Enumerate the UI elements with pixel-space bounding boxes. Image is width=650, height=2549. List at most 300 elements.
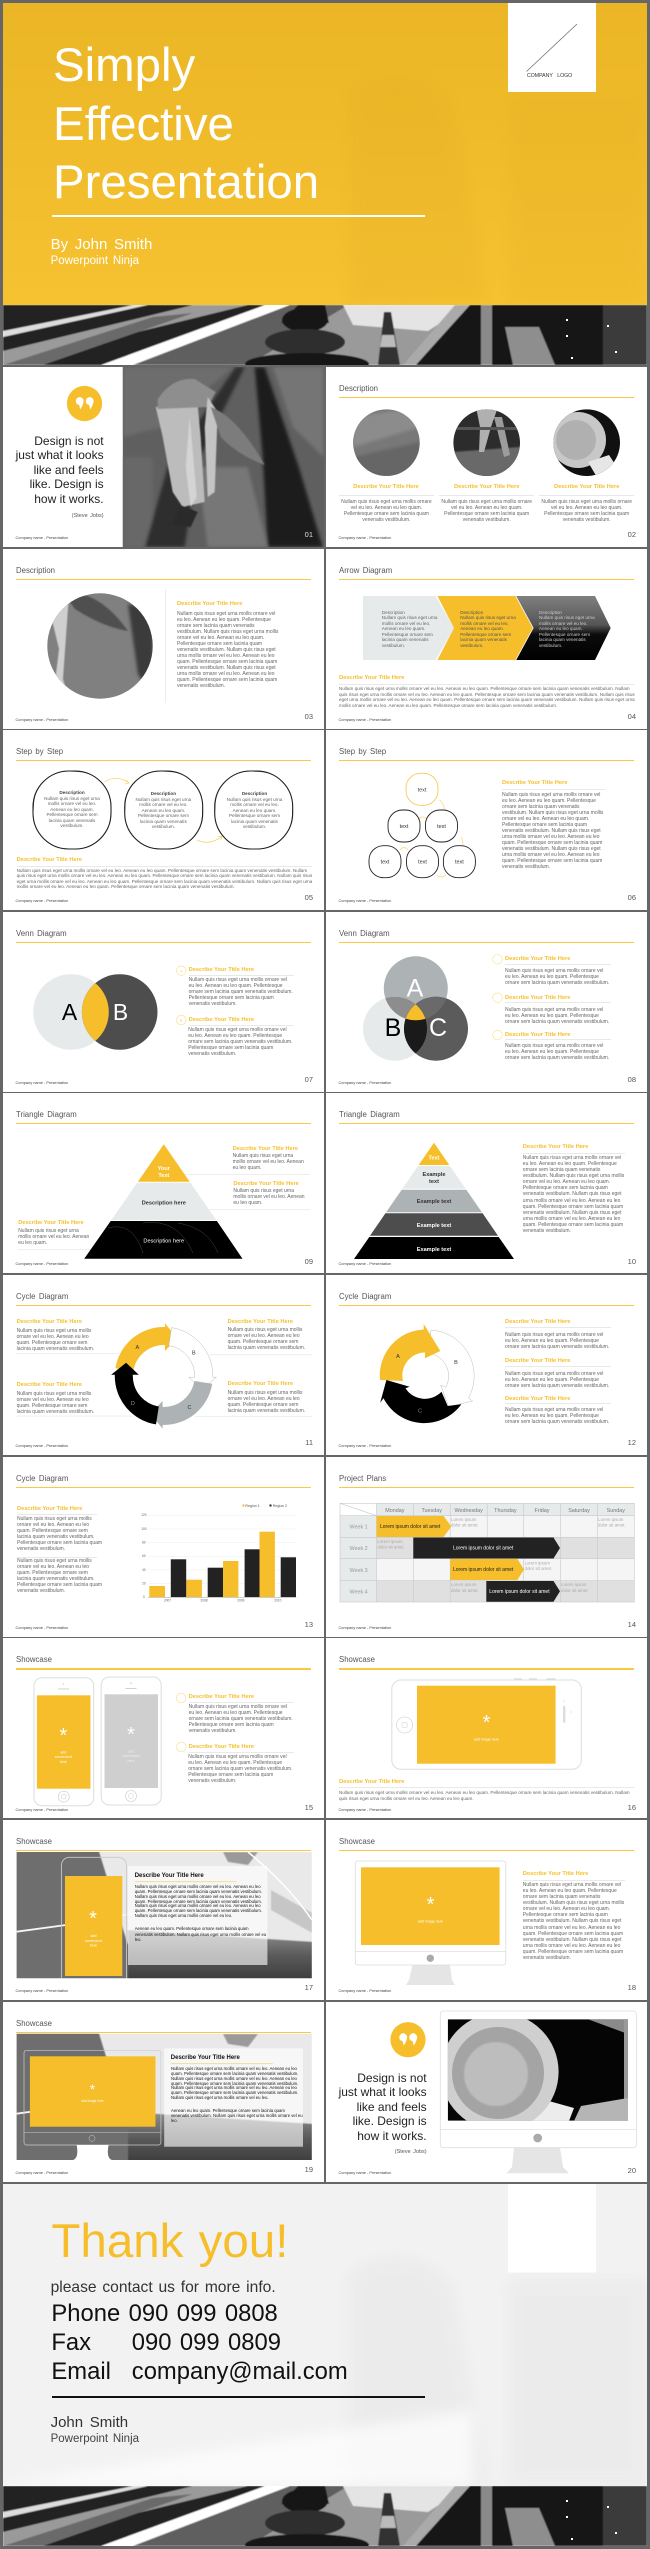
text block 2: venenatis vestibulum. xyxy=(17,1588,65,1594)
translucent text panel xyxy=(128,1866,267,1965)
phone line: Phone 090 099 0808 xyxy=(51,2300,278,2326)
footer: Company name - Presentation xyxy=(338,535,391,540)
heading rule xyxy=(16,1486,311,1488)
body text: ornare sem lacinia quam venenatis xyxy=(177,623,255,629)
image: grass circle xyxy=(353,407,420,477)
left text: eu leo quam. xyxy=(18,1240,47,1246)
body text xyxy=(502,792,604,870)
pyramid level 4: Example text xyxy=(417,1223,451,1229)
subtitle rule xyxy=(502,788,604,791)
small schedule notes: Lorem ipsum xyxy=(598,1517,624,1522)
top left title: Describe Your Title Here xyxy=(17,1319,82,1325)
body text: urna mollis ornare vel eu leo. Aenean eu leo xyxy=(177,671,275,677)
panel: slide 10 triangle diagram xyxy=(326,1093,647,1273)
panel text xyxy=(134,1884,262,1918)
body text xyxy=(16,868,312,889)
right lower text: mollis ornare vel eu leo. Aenean xyxy=(233,1194,305,1200)
top right title: Describe Your Title Here xyxy=(228,1319,293,1325)
panel text: Nullam quis risus eget urna mollis ornare vel eu leo. Aenean eu leo xyxy=(135,1894,261,1899)
item B title: Describe Your Title Here xyxy=(505,995,570,1001)
step 1 text xyxy=(44,790,100,828)
footer: Company name - Presentation xyxy=(338,1261,391,1266)
triangle yellow top: Text xyxy=(158,1173,169,1179)
footer: Company name - Presentation xyxy=(16,2170,68,2175)
column 2 text: venenatis vestibulum. xyxy=(463,517,511,523)
week labels: Week 1 xyxy=(350,1525,368,1531)
small schedule notes xyxy=(377,1517,626,1593)
item B text: venenatis vestibulum. xyxy=(188,1778,236,1784)
fax label: Fax xyxy=(51,2329,91,2356)
panel: slide 15 phone showcase xyxy=(3,1638,324,1818)
panel: slide 19 monitor over photo xyxy=(3,2002,324,2182)
quote text: like and feels xyxy=(357,2100,427,2114)
column 2 rule xyxy=(439,494,534,496)
panel: slide 02 description with three images xyxy=(326,367,647,547)
body text xyxy=(522,1882,624,1961)
phone outline with screen: here xyxy=(90,1944,97,1948)
day headers: Wednesday xyxy=(455,1508,483,1514)
text block 2 xyxy=(17,1558,102,1594)
phone mockup grey: screenshot xyxy=(122,1754,140,1758)
body text: venenatis vestibulum. Nullam quis risus eget xyxy=(177,665,276,671)
panel text: quam. Pellentesque ornare sem lacinia quam venenatis vestibulum. xyxy=(171,2071,298,2076)
body text: vestibulum. Nullam quis risus eget urna mollis xyxy=(177,629,278,635)
subtitle: Describe Your Title Here xyxy=(17,1506,82,1512)
column 2 text xyxy=(441,499,532,523)
page number: 13 xyxy=(305,1620,313,1629)
quote text: Design is not xyxy=(357,2071,427,2085)
small schedule notes: dolor sit amet. xyxy=(451,1588,479,1593)
item A text: ornare sem lacinia quam venenatis vestibulum. xyxy=(505,980,609,986)
panel title: Describe Your Title Here xyxy=(171,2055,240,2061)
subtitle: Describe Your Title Here xyxy=(523,1871,588,1877)
item 2 text xyxy=(505,1371,609,1389)
text block 1: lacinia quam venenatis vestibulum. xyxy=(17,1534,95,1540)
text block 2: quam. Pellentesque ornare sem xyxy=(17,1570,88,1576)
page number: 17 xyxy=(305,1983,313,1992)
step 2 text: Nullam quis risus eget urna xyxy=(136,796,191,802)
heading rule xyxy=(339,578,634,580)
phone outline with screen: add xyxy=(91,1934,96,1938)
page number: 04 xyxy=(628,712,636,721)
y axis labels: 80 xyxy=(142,1540,146,1544)
item C title: Describe Your Title Here xyxy=(505,1032,570,1038)
page number: 03 xyxy=(305,712,313,721)
item A rule xyxy=(189,974,294,977)
column 1 text xyxy=(341,499,432,523)
phone mockup grey xyxy=(101,1677,161,1805)
image: legs circle xyxy=(453,407,520,477)
heading: Venn Diagram xyxy=(16,928,67,938)
panel text: Nullam quis risus eget urna mollis ornare vel eu leo. Aenean eu leo xyxy=(171,2076,297,2081)
body text: ornare vel eu leo. Aenean eu leo quam. xyxy=(502,816,589,822)
triangle base band xyxy=(84,1221,242,1259)
small schedule notes: dolor sit amet. xyxy=(377,1544,405,1550)
body text: quam. Pellentesque ornare sem lacinia quam xyxy=(502,840,602,846)
panel text continued xyxy=(171,2108,303,2124)
body text: eu leo. Aenean eu leo quam. Pellentesque xyxy=(177,617,271,623)
item B rule xyxy=(505,1001,611,1004)
bottom left text xyxy=(16,1391,94,1415)
title: Simply xyxy=(53,39,195,92)
top left text: ornare vel eu leo. Aenean eu leo xyxy=(17,1334,89,1340)
task bar week 3: Lorem ipsum dolor sit amet xyxy=(453,1567,514,1573)
arrow 1 text xyxy=(382,610,438,648)
panel text continued: leo. xyxy=(135,1937,142,1942)
small schedule notes: dolor sit amet. xyxy=(598,1522,626,1528)
day headers: Thursday xyxy=(494,1508,517,1514)
arrow 3 text: Nullam quis risus eget urna xyxy=(539,615,595,620)
top yellow circle: text xyxy=(418,787,427,793)
bullet B xyxy=(176,1015,186,1025)
top yellow circle xyxy=(406,773,438,805)
footer: Company name - Presentation xyxy=(338,717,391,722)
panel rule xyxy=(135,1880,237,1883)
footer: Company name - Presentation xyxy=(338,1625,391,1630)
item 3 text xyxy=(505,1407,609,1425)
arrow 3 text: Description xyxy=(539,610,562,615)
week labels xyxy=(350,1525,368,1596)
icon: quotation mark xyxy=(66,367,324,547)
item C rule xyxy=(505,1038,611,1041)
x axis labels: 2007 xyxy=(164,1598,171,1602)
heading rule xyxy=(16,1123,311,1124)
footer: Company name - Presentation xyxy=(338,1080,391,1085)
footer: Company name - Presentation xyxy=(338,2170,391,2175)
panel title: Describe Your Title Here xyxy=(135,1873,204,1879)
day headers: Sunday xyxy=(607,1508,625,1514)
arrow A: A xyxy=(396,1354,400,1360)
panel: slide 18 monitor showcase xyxy=(326,1820,647,2000)
arrow 1 text: Nullam quis risus eget urna xyxy=(382,615,437,620)
connector rules xyxy=(17,1353,312,1417)
step 1 text: Aenean eu leo quam. xyxy=(50,807,94,812)
arrow C: C xyxy=(188,1405,192,1411)
footer: Company name - Presentation xyxy=(338,1443,391,1448)
panel text: quam. Pellentesque ornare sem lacinia quam venenatis vestibulum. xyxy=(171,2081,298,2086)
item B text: Nullam quis risus eget urna mollis ornare vel xyxy=(188,1027,287,1033)
task bar week 3 xyxy=(450,1559,524,1580)
panel: slide 01 quote xyxy=(3,367,324,547)
body text: mollis ornare vel eu leo. Aenean eu leo quam. Pellentesque ornare sem lacinia quam venenatis vestibulum. xyxy=(339,702,557,708)
item 3 title: Describe Your Title Here xyxy=(505,1396,570,1402)
phone mockup yellow: * xyxy=(60,1725,68,1747)
body text xyxy=(339,686,635,708)
body text: Nullam quis risus eget urna mollis ornare vel xyxy=(177,611,275,617)
day headers xyxy=(385,1508,625,1514)
top left text: quam. Pellentesque ornare sem xyxy=(17,1340,87,1346)
connecting arcs xyxy=(400,800,463,877)
arrow A: A xyxy=(135,1345,139,1351)
bullet A xyxy=(176,966,186,976)
left text: mollis ornare vel eu leo. Aenean xyxy=(18,1234,89,1240)
body text: Pellentesque ornare sem lacinia quam xyxy=(502,822,587,828)
item 3 rule xyxy=(505,1402,611,1404)
footer: Company name - Presentation xyxy=(338,1988,391,1993)
arrow 1 text: Aenean eu leo quam. xyxy=(382,626,425,631)
page number: 01 xyxy=(305,530,313,539)
item A text: eu leo. Aenean eu leo quam. Pellentesque xyxy=(189,983,283,989)
body text xyxy=(522,1155,624,1234)
page number: 12 xyxy=(628,1438,636,1447)
bottom circles xyxy=(369,846,475,878)
item A text: ornare sem lacinia quam venenatis vestibulum. xyxy=(189,1716,293,1722)
item C text: ornare sem lacinia quam venenatis vestibulum. xyxy=(505,1055,609,1061)
body text: Pellentesque ornare sem lacinia quam xyxy=(523,1185,608,1191)
page number: 14 xyxy=(628,1620,636,1629)
subtitle: Describe Your Title Here xyxy=(17,857,82,863)
body text: eu leo. Aenean eu leo quam. Pellentesque xyxy=(523,1161,617,1167)
quote text: like. Design is xyxy=(353,2114,427,2128)
author role: Powerpoint Ninja xyxy=(51,255,139,267)
arrow 2 text: Pellentesque ornare sem xyxy=(460,632,511,637)
yellow photo overlay background xyxy=(3,3,647,305)
column 2 text: Pellentesque ornare sem lacinia quam xyxy=(444,511,529,517)
panel text: Nullam quis risus eget urna mollis ornare vel eu leo. xyxy=(171,2095,269,2100)
y axis labels: 0 xyxy=(143,1595,145,1599)
monitor mockup xyxy=(355,1861,506,1985)
body text: Nullam quis risus eget urna mollis ornare vel eu leo. Aenean eu leo quam. Pellentesque ornare sem lacinia quam venenatis vestibulum. Nullam xyxy=(339,686,630,691)
landscape phone mockup: * xyxy=(483,1712,491,1734)
x axis labels: 2010 xyxy=(274,1598,282,1602)
footer: Company name - Presentation xyxy=(16,1443,68,1448)
monitor outline with screen xyxy=(24,2050,161,2160)
phone outline with screen xyxy=(61,1857,126,1987)
item B text: venenatis vestibulum. xyxy=(188,1051,236,1057)
left title: Describe Your Title Here xyxy=(18,1220,84,1226)
heading: Arrow Diagram xyxy=(339,566,392,574)
item A text: Nullam quis risus eget urna mollis ornare vel xyxy=(189,977,287,983)
panel: slide 07 two circle venn xyxy=(3,912,324,1092)
bottom right text: ornare vel eu leo. Aenean eu leo xyxy=(228,1396,300,1402)
panel text: Nullam quis risus eget urna mollis ornare vel eu leo. Aenean eu leo xyxy=(135,1903,261,1908)
footer: Company name - Presentation xyxy=(338,1807,391,1812)
subtitle: Describe Your Title Here xyxy=(339,1779,404,1785)
subtitle rule xyxy=(17,865,312,867)
right lower text: Nullam quis risus eget urna xyxy=(233,1188,294,1194)
body text: venenatis vestibulum. Nullam quis risus eget xyxy=(177,647,276,653)
task bar week 4 xyxy=(486,1581,560,1602)
column 3 text: venenatis vestibulum. xyxy=(563,517,611,523)
panel: closing slide xyxy=(3,2184,647,2546)
bullet A: A xyxy=(180,969,182,973)
day headers: Friday xyxy=(535,1508,550,1514)
step 3 text xyxy=(227,791,282,829)
body text: urna mollis ornare vel eu leo. Aenean eu leo xyxy=(502,834,600,840)
body text: Nullam quis risus eget urna mollis ornare vel xyxy=(523,1882,621,1888)
arrow B: B xyxy=(192,1350,196,1356)
divider xyxy=(164,589,167,703)
item B text xyxy=(188,1027,292,1057)
footer: Company name - Presentation xyxy=(16,1988,68,1993)
body text: ornare sem lacinia quam venenatis xyxy=(523,1894,600,1900)
page number: 08 xyxy=(628,1075,636,1084)
subtitle rule xyxy=(523,1152,625,1155)
panel text: quam. Pellentesque ornare sem lacinia quam venenatis vestibulum. xyxy=(135,1908,262,1913)
small schedule notes: Lorem ipsum xyxy=(524,1560,550,1566)
photo strip: street with hydrant and cone xyxy=(3,2486,647,2549)
photo strip: street with hydrant and cone xyxy=(3,305,647,365)
top right text: lacinia quam venenatis vestibulum. xyxy=(228,1345,305,1351)
panel: slide 20 quote with monitor xyxy=(326,2002,647,2182)
quote text xyxy=(15,434,104,506)
column 2 title: Describe Your Title Here xyxy=(454,484,519,490)
item 1 text xyxy=(505,1332,609,1350)
panel: cover slide xyxy=(3,3,647,365)
arrow 3 text: vestibulum. xyxy=(539,643,562,648)
monitor outline with screen: * xyxy=(90,2081,96,2097)
triangle yellow top: Your xyxy=(158,1166,171,1172)
heading: Showcase xyxy=(16,1655,52,1664)
heading: Description xyxy=(339,384,378,392)
footer: Company name - Presentation xyxy=(16,1080,68,1085)
triangle yellow top xyxy=(138,1144,190,1182)
panel: slide 06 step by step pyramid xyxy=(326,730,647,910)
panel text: quam. Pellentesque ornare sem lacinia quam venenatis vestibulum. xyxy=(135,1889,262,1894)
item C text: Nullam quis risus eget urna mollis ornare vel xyxy=(505,1043,603,1049)
body text: urna mollis ornare vel eu leo. Aenean eu leo xyxy=(523,1925,620,1931)
heading: Cycle Diagram xyxy=(339,1292,391,1301)
company logo box xyxy=(508,3,596,92)
arrow 3 text: mollis ornare vel eu leo. xyxy=(539,621,588,626)
step 3 text: mollis ornare vel eu leo. xyxy=(230,802,279,807)
series: region 1 bars xyxy=(149,1532,275,1597)
item B rule xyxy=(189,1751,294,1753)
legend xyxy=(242,1504,287,1508)
item B text: ornare sem lacinia quam venenatis vestibulum. xyxy=(188,1039,292,1045)
panel text: quam. Pellentesque ornare sem lacinia quam venenatis vestibulum. xyxy=(171,2090,298,2095)
arrow 1 xyxy=(363,596,454,660)
quote text xyxy=(339,2071,427,2143)
arrow 3 text xyxy=(539,610,595,648)
panel text continued: venenatis vestibulum. Nullam quis risus eget urna mollis ornare vel eu xyxy=(171,2113,303,2118)
item B text: Pellentesque ornare sem lacinia quam xyxy=(188,1772,273,1778)
right top text: Nullam quis risus eget urna xyxy=(233,1153,293,1159)
panel: slide 08 three circle venn xyxy=(326,912,647,1092)
column 1 rule xyxy=(339,494,434,496)
quote text: how it works. xyxy=(34,492,104,506)
arrow 3 xyxy=(516,596,611,660)
bullet B: B xyxy=(180,1018,182,1022)
quote text: just what it looks xyxy=(16,448,104,462)
item A text xyxy=(505,968,609,986)
image: bending figure circle xyxy=(47,593,153,699)
y axis labels: 20 xyxy=(142,1581,146,1585)
small schedule notes: Lorem ipsum xyxy=(561,1582,587,1587)
middle circles: text xyxy=(437,824,446,830)
column 1 text: vel eu leo. Aenean eu leo quam. xyxy=(351,505,422,511)
subtitle: Describe Your Title Here xyxy=(339,675,404,681)
subtitle: Describe Your Title Here xyxy=(502,780,567,786)
body text: venenatis vestibulum. Nullam quis risus eget xyxy=(523,1191,621,1197)
text block 2: Nullam quis risus eget urna mollis xyxy=(17,1558,92,1564)
page number: 16 xyxy=(628,1802,636,1812)
item B title: Describe Your Title Here xyxy=(189,1017,254,1023)
bottom right text: Nullam quis risus eget urna mollis xyxy=(228,1390,302,1396)
right lower text xyxy=(233,1188,305,1206)
pyramid level 2 xyxy=(402,1166,466,1189)
body text: venenatis vestibulum. xyxy=(502,864,550,870)
right lower title: Describe Your Title Here xyxy=(233,1181,299,1187)
body text: ornare vel eu leo. Aenean eu leo quam. xyxy=(177,635,264,641)
heading rule xyxy=(339,942,634,943)
day headers: Tuesday xyxy=(421,1508,442,1514)
venn diagram: B xyxy=(113,999,128,1025)
heading: Triangle Diagram xyxy=(16,1110,77,1119)
x axis labels xyxy=(164,1598,282,1602)
panel: slide 11 cycle diagram xyxy=(3,1275,324,1455)
step 2 text: lacinia quam venenatis xyxy=(140,818,187,824)
thank you heading: Thank you! xyxy=(51,2215,288,2268)
heading rule xyxy=(16,2032,311,2033)
item 1 title: Describe Your Title Here xyxy=(505,1319,570,1325)
phone mockup yellow xyxy=(34,1678,94,1806)
body text: quam. Pellentesque ornare sem lacinia quam xyxy=(177,677,277,683)
bottom right text xyxy=(228,1390,305,1414)
step 2 text: Pellentesque ornare sem xyxy=(138,813,189,818)
item A text: venenatis vestibulum. xyxy=(189,1001,237,1007)
item B text xyxy=(188,1754,292,1784)
phone outline with screen: screenshot xyxy=(85,1939,102,1943)
step 2 text: vestibulum. xyxy=(152,824,175,829)
heading rule xyxy=(16,1668,311,1670)
panel: slide 13 bar chart xyxy=(3,1457,324,1637)
arrow 3 text: Aenean eu leo quam. xyxy=(539,626,583,631)
author: John Smith xyxy=(51,2414,128,2431)
pyramid level 4 xyxy=(370,1213,498,1236)
image: cup circle xyxy=(550,409,620,479)
body text: quis risus eget urna mollis ornare vel eu leo. Aenean eu leo quam. Pellentesque ornare sem lacinia quam venenatis vestibulum. Nullam quis risus xyxy=(17,873,312,878)
translucent text panel xyxy=(164,2048,303,2147)
step 1 text: Nullam quis risus eget urna xyxy=(44,796,100,801)
arrow 2 text: Description xyxy=(460,610,483,615)
text block 1: quam. Pellentesque ornare sem xyxy=(17,1528,88,1534)
item A text: Nullam quis risus eget urna mollis ornare vel xyxy=(505,968,603,974)
heading: Description xyxy=(16,566,55,574)
bottom left text: Nullam quis risus eget urna mollis xyxy=(17,1391,91,1397)
column 3 text: Nullam quis risus eget urna mollis ornare xyxy=(541,499,632,505)
footer: Company name - Presentation xyxy=(16,1807,68,1812)
venn diagram xyxy=(363,956,468,1061)
arrow 3 text: Pellentesque ornare sem xyxy=(539,632,590,637)
bottom left title: Describe Your Title Here xyxy=(17,1382,82,1388)
body text: venenatis vestibulum. Nullam quis risus eget xyxy=(523,1918,621,1924)
step 2 text xyxy=(136,791,192,829)
y axis labels: 60 xyxy=(142,1554,146,1558)
body text: venenatis vestibulum. Nullam quis risus eget xyxy=(502,828,601,834)
heading rule xyxy=(16,578,311,580)
bottom left text: ornare vel eu leo. Aenean eu leo xyxy=(17,1397,89,1403)
phone mockup grey: here xyxy=(127,1759,135,1763)
heading: Cycle Diagram xyxy=(16,1292,68,1301)
right lower text: eu leo quam. xyxy=(233,1200,262,1206)
arrow 2 xyxy=(437,596,533,660)
body text: quis risus eget urna mollis ornare vel eu leo. Aenean eu leo quam. xyxy=(339,1796,474,1801)
top left text: lacinia quam venenatis vestibulum. xyxy=(17,1346,94,1352)
item A rule xyxy=(505,963,611,965)
author role: Powerpoint Ninja xyxy=(51,2433,139,2445)
phone mockup yellow: add xyxy=(60,1750,66,1754)
top right text: quam. Pellentesque ornare sem xyxy=(228,1339,298,1345)
heading rule xyxy=(16,1850,311,1851)
panel: slide 17 phone over photo xyxy=(3,1820,324,2000)
task bar week 2 xyxy=(413,1538,560,1558)
text divider xyxy=(17,1556,97,1559)
footer: Company name - Presentation xyxy=(16,1261,68,1266)
quote text: like and feels xyxy=(34,463,104,477)
step 1 text: Description xyxy=(59,790,85,795)
heading rule xyxy=(339,760,634,761)
